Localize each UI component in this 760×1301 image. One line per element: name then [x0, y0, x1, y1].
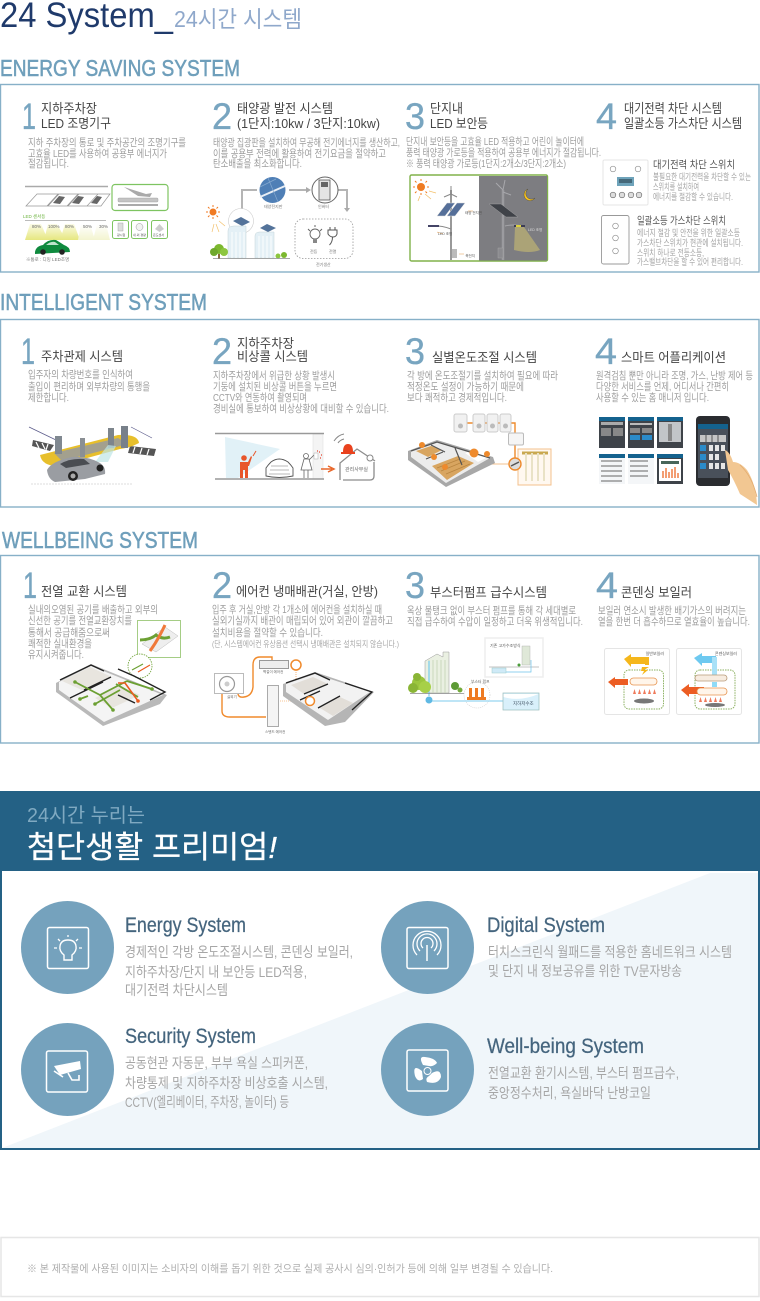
item: emergency call: CCTV와 연동하여 촬영되며 [213, 391, 307, 404]
item: heat exchange: 신선한 공기를 전열교환장치를 [28, 615, 132, 627]
item: smart application [595, 331, 757, 505]
title [0, 0, 302, 35]
item: emergency call: 지하주차장 [237, 336, 294, 351]
item: parking control: 1 [21, 331, 35, 372]
heading: intelligent system: INTELLIGENT SYSTEM [0, 289, 207, 315]
illustration: emergency call scene: 관리사무실 [345, 466, 368, 473]
item: standby power and gas shutoff: 4 [596, 96, 617, 137]
illustration: LED parking diagram: 100% [48, 224, 60, 229]
item: LED parking light: 지하주차장 [41, 101, 97, 116]
item: air conditioner piping: 에어컨 냉매배관(거실, 안방) [236, 584, 378, 599]
item: parking control: 주차관제 시스템 [41, 349, 123, 364]
item: smart application: 사용할 수 있는 홈 매니저 입니다. [596, 391, 709, 404]
item: security system [21, 1023, 328, 1116]
panel: energy saving [0, 84, 759, 272]
illustration: LED parking diagram: LED 센서등 [23, 213, 45, 220]
item: solar power: (1단지:10kw / 3단지:10kw) [237, 116, 380, 131]
item: digital system [381, 901, 732, 994]
illustration: LED parking diagram: 30% [99, 224, 108, 229]
item: standby power and gas shutoff: 대기전력 차단 스위치 [653, 158, 735, 171]
illustration: solar diagram: 전기생산 [316, 261, 331, 267]
illustration: booster pump diagram: 부스터 펌프 [471, 679, 490, 684]
item: room temperature control: 3 [405, 331, 425, 372]
item: air conditioner piping: 2 [212, 565, 232, 606]
item: energy system: Energy System [125, 914, 246, 937]
item: smart application: 4 [595, 331, 617, 372]
illustration: solar diagram [206, 177, 353, 267]
item: LED security light: 단지내 보안등을 고효율 LED 적용하고 어린이 놀이터에 [406, 135, 584, 148]
item: booster pump: 3 [405, 565, 425, 606]
item: digital system: Digital System [487, 914, 605, 937]
item: LED parking light: 지하 주차장의 통로 및 주차공간의 조명기구를 [28, 136, 186, 149]
item: energy system: 대기전력 차단시스템 [125, 982, 228, 998]
premium header [0, 791, 760, 871]
illustration: LED parking diagram: 온도센서 [153, 232, 164, 237]
disclaimer box: ※ 본 제작물에 사용된 이미지는 소비자의 이해를 돕기 위한 것으로 실제 공사시 심의·인허가 등에 의해 일부 변경될 수 있습니다. [27, 1262, 553, 1275]
illustration: app screens and phone [599, 416, 757, 505]
item: security system: Security System [125, 1025, 256, 1048]
item: solar power: 태양광 발전 시스템 [237, 101, 333, 116]
item: room temperature control: 보다 쾌적하고 경제적입니다. [407, 391, 507, 404]
item: energy system [21, 901, 353, 998]
item: LED parking light [22, 96, 186, 263]
item: digital system: 및 단지 내 정보공유를 위한 TV문자방송 [488, 963, 682, 979]
item: condensing boiler [596, 565, 750, 714]
item: heat exchange: 1 [23, 565, 37, 606]
disclaimer box [1, 1238, 759, 1296]
item: condensing boiler: 콘덴싱 보일러 [621, 585, 692, 600]
illustration: parking gate and car [29, 426, 156, 484]
item: heat exchange: 전열 교환 시스템 [41, 584, 127, 599]
item: LED parking light: LED 조명기구 [41, 116, 111, 131]
item: LED security light: ※ 풍력 태양광 가로등(1단지:2개소/3단지:2개소) [406, 158, 566, 170]
illustration: LED parking diagram: 80% [65, 224, 74, 229]
item: air conditioner piping: 실외기실까지 배관이 매립되어 있어 외관이 깔끔하고 [212, 614, 393, 627]
item: security system: 공동현관 자동문, 부부 욕실 스피커폰, [125, 1055, 308, 1071]
illustration: solar diagram: 태양전지판 [264, 203, 283, 209]
item: room temperature control [405, 331, 558, 487]
illustration: LED parking diagram [23, 184, 168, 263]
item: parking control: 출입이 편리하며 외부차량의 통행을 [28, 380, 150, 393]
item: heat exchange: 통해서 공급해줌으로써 [28, 626, 110, 639]
illustration: LED parking diagram: 80% [32, 224, 41, 229]
item: heat exchange [23, 565, 180, 726]
item: booster pump: 부스터펌프 급수시스템 [430, 585, 547, 600]
item: air conditioner piping: 입주 후 거실,안방 각 1개소에 에어컨을 설치하실 때 [212, 603, 382, 616]
item: energy system: 지하주차장/단지 내 보안등 LED적용, [125, 964, 307, 980]
illustration: solar diagram: 인버터 [318, 203, 329, 209]
premium header: 24시간 누리는 [27, 804, 145, 827]
item: standby power and gas shutoff: 대기전력 차단 시스템 [624, 101, 722, 116]
item: smart application: 스마트 어플리케이션 [621, 350, 726, 365]
item: well-being system: 전열교환 환기시스템, 부스터 펌프급수, [488, 1065, 679, 1081]
item: emergency call: 2 [212, 331, 232, 372]
item: LED security light [405, 96, 601, 261]
icon: security camera [21, 1023, 114, 1116]
item: standby power and gas shutoff [596, 96, 751, 267]
item: solar power: 2 [212, 96, 232, 137]
item: well-being system [381, 1023, 679, 1116]
item: solar power [206, 96, 400, 267]
item: booster pump: 옥상 물탱크 없이 부스터 펌프를 통해 각 세대별로 [407, 604, 576, 617]
icon: light bulb [21, 901, 114, 994]
illustration: AC units and floor plan: 실외기 [227, 694, 237, 699]
item: LED security light: 3 [405, 96, 425, 137]
item: solar power: 이를 공용부 전력에 활용하여 전기요금을 절약하고 [213, 147, 386, 160]
illustration: AC units and floor plan [214, 657, 374, 734]
item: air conditioner piping: 설치비용을 절약할 수 있습니다. [212, 626, 323, 639]
illustration: ventilation floor plan [56, 620, 180, 726]
illustration: wind-solar street light day and night: 축전지 [465, 253, 475, 258]
item: LED parking light: 절감됩니다. [28, 157, 69, 170]
item: LED parking light: 1 [22, 96, 36, 137]
illustration: solar diagram: 전열 [329, 248, 337, 254]
icon: fan [381, 1023, 474, 1116]
illustration: boiler comparison [604, 648, 742, 714]
item: solar power: 태양광 집광판을 설치하여 무공해 전기에너지를 생산하고, [213, 136, 400, 149]
item: LED parking light: 고효율 LED를 사용하여 공용부 에너지가 [28, 147, 167, 160]
item: air conditioner piping [212, 565, 399, 734]
item: standby power and gas shutoff: 에너지를 절감할 수 있습니다. [653, 191, 733, 202]
item: LED security light: LED 보안등 [430, 116, 488, 131]
illustration: AC units and floor plan: 벽걸이 에어컨 [263, 669, 283, 674]
illustration: solar diagram: 전등 [310, 248, 318, 254]
item: standby power and gas shutoff: 일괄소등 가스차단 스위치 [637, 214, 726, 227]
heading: energy saving system: ENERGY SAVING SYSTEM [0, 55, 240, 81]
illustration: boiler comparison: 콘덴싱보일러 [715, 650, 737, 656]
illustration: wind-solar street light day and night [410, 175, 548, 261]
item: well-being system: 중앙정수처리, 욕실바닥 난방코일 [488, 1085, 651, 1101]
item: standby power and gas shutoff: 스위치 하나로 전등소등, [637, 247, 704, 258]
item: energy system: 경제적인 각방 온도조절시스템, 콘덴싱 보일러, [125, 944, 353, 960]
illustration: booster pump diagram: 지하저수조 [513, 700, 534, 707]
illustration: wind-solar street light day and night: LED 조명 [438, 231, 452, 236]
item: heat exchange: 실내의오염된 공기를 배출하고 외부의 [28, 603, 158, 616]
item: solar power: 탄소배출을 최소화합니다. [213, 158, 302, 170]
illustration: LED parking diagram: ※통로 : 디밍 LED조명 [26, 256, 69, 263]
illustration: LED parking diagram: 50% [83, 224, 92, 229]
item: emergency call: 기둥에 설치된 비상콜 버튼을 누르면 [213, 381, 337, 393]
item: standby power and gas shutoff: 일괄소등 가스차단 시스템 [624, 116, 742, 131]
premium header: 첨단생활 프리미엄! [27, 830, 277, 865]
illustration: booster pump diagram [408, 638, 543, 710]
illustration: wind-solar street light day and night: LED 조명 [528, 227, 542, 232]
illustration: LED parking diagram: 내·외 경량 [133, 232, 146, 237]
icon: antenna signal [381, 901, 474, 994]
item: parking control: 입주자의 차량번호를 인식하여 [28, 368, 133, 381]
item: emergency call: 경비실에 통보하여 비상상황에 대비할 수 있습니다. [213, 402, 389, 415]
panel: intelligent [0, 320, 759, 507]
item: security system: 차량통제 및 지하주차장 비상호출 시스템, [125, 1075, 328, 1091]
illustration: LED parking diagram: 광시험 [117, 232, 126, 237]
item: heat exchange: 유지시켜줍니다. [28, 649, 84, 661]
item: parking control: 제한합니다. [28, 392, 69, 404]
illustration: boiler comparison: 일반보일러 [646, 650, 664, 656]
item: standby power and gas shutoff: 스위치를 설치하여 [653, 181, 699, 192]
item: heat exchange: 쾌적한 실내환경을 [28, 637, 92, 650]
item: LED security light: 단지내 [430, 101, 463, 116]
item: booster pump: 직접 급수하여 수압이 일정하고 더욱 위생적입니다. [407, 615, 583, 628]
panel: premium [0, 791, 760, 1149]
item: security system: CCTV(엘리베이터, 주차장, 놀이터) 등 [125, 1094, 289, 1110]
heading: wellbeing system: WELLBEING SYSTEM [2, 527, 198, 553]
item: emergency call: 비상콜 시스템 [237, 349, 308, 364]
illustration: booster pump diagram: 기존 고가수조방식 [490, 642, 521, 648]
item: air conditioner piping: (단, 시스템에어컨 유상옵션 선택시 냉매배관은 설치되지 않습니다.) [212, 639, 399, 649]
item: emergency call [212, 331, 389, 480]
illustration: emergency call scene [215, 434, 375, 480]
item: room temperature control: 적정온도 설정이 가능하기 때문에 [407, 380, 524, 393]
item: condensing boiler: 4 [596, 565, 618, 606]
item: emergency call: 지하주차장에서 위급한 상황 발생시 [213, 369, 335, 382]
title: 24시간 시스템 [174, 6, 302, 32]
panel: wellbeing [0, 556, 759, 743]
item: room temperature control: 실별온도조절 시스템 [432, 350, 537, 365]
illustration: heating floor plan [408, 414, 551, 487]
illustration: gas shutoff switch [602, 216, 629, 264]
illustration: AC units and floor plan: 스탠드 에어컨 [265, 729, 285, 734]
item: parking control [21, 331, 156, 484]
illustration: wind-solar street light day and night: 태양 전지판 [465, 210, 483, 215]
item: booster pump [405, 565, 583, 710]
item: room temperature control: 각 방에 온도조절기를 설치하여 필요에 따라 [407, 369, 558, 382]
illustration: standby switch [603, 160, 648, 205]
item: LED security light: 풍력 태양광 가로등을 적용하여 공용부 에너지가 절감됩니다. [406, 146, 601, 159]
item: well-being system: Well-being System [487, 1035, 644, 1058]
